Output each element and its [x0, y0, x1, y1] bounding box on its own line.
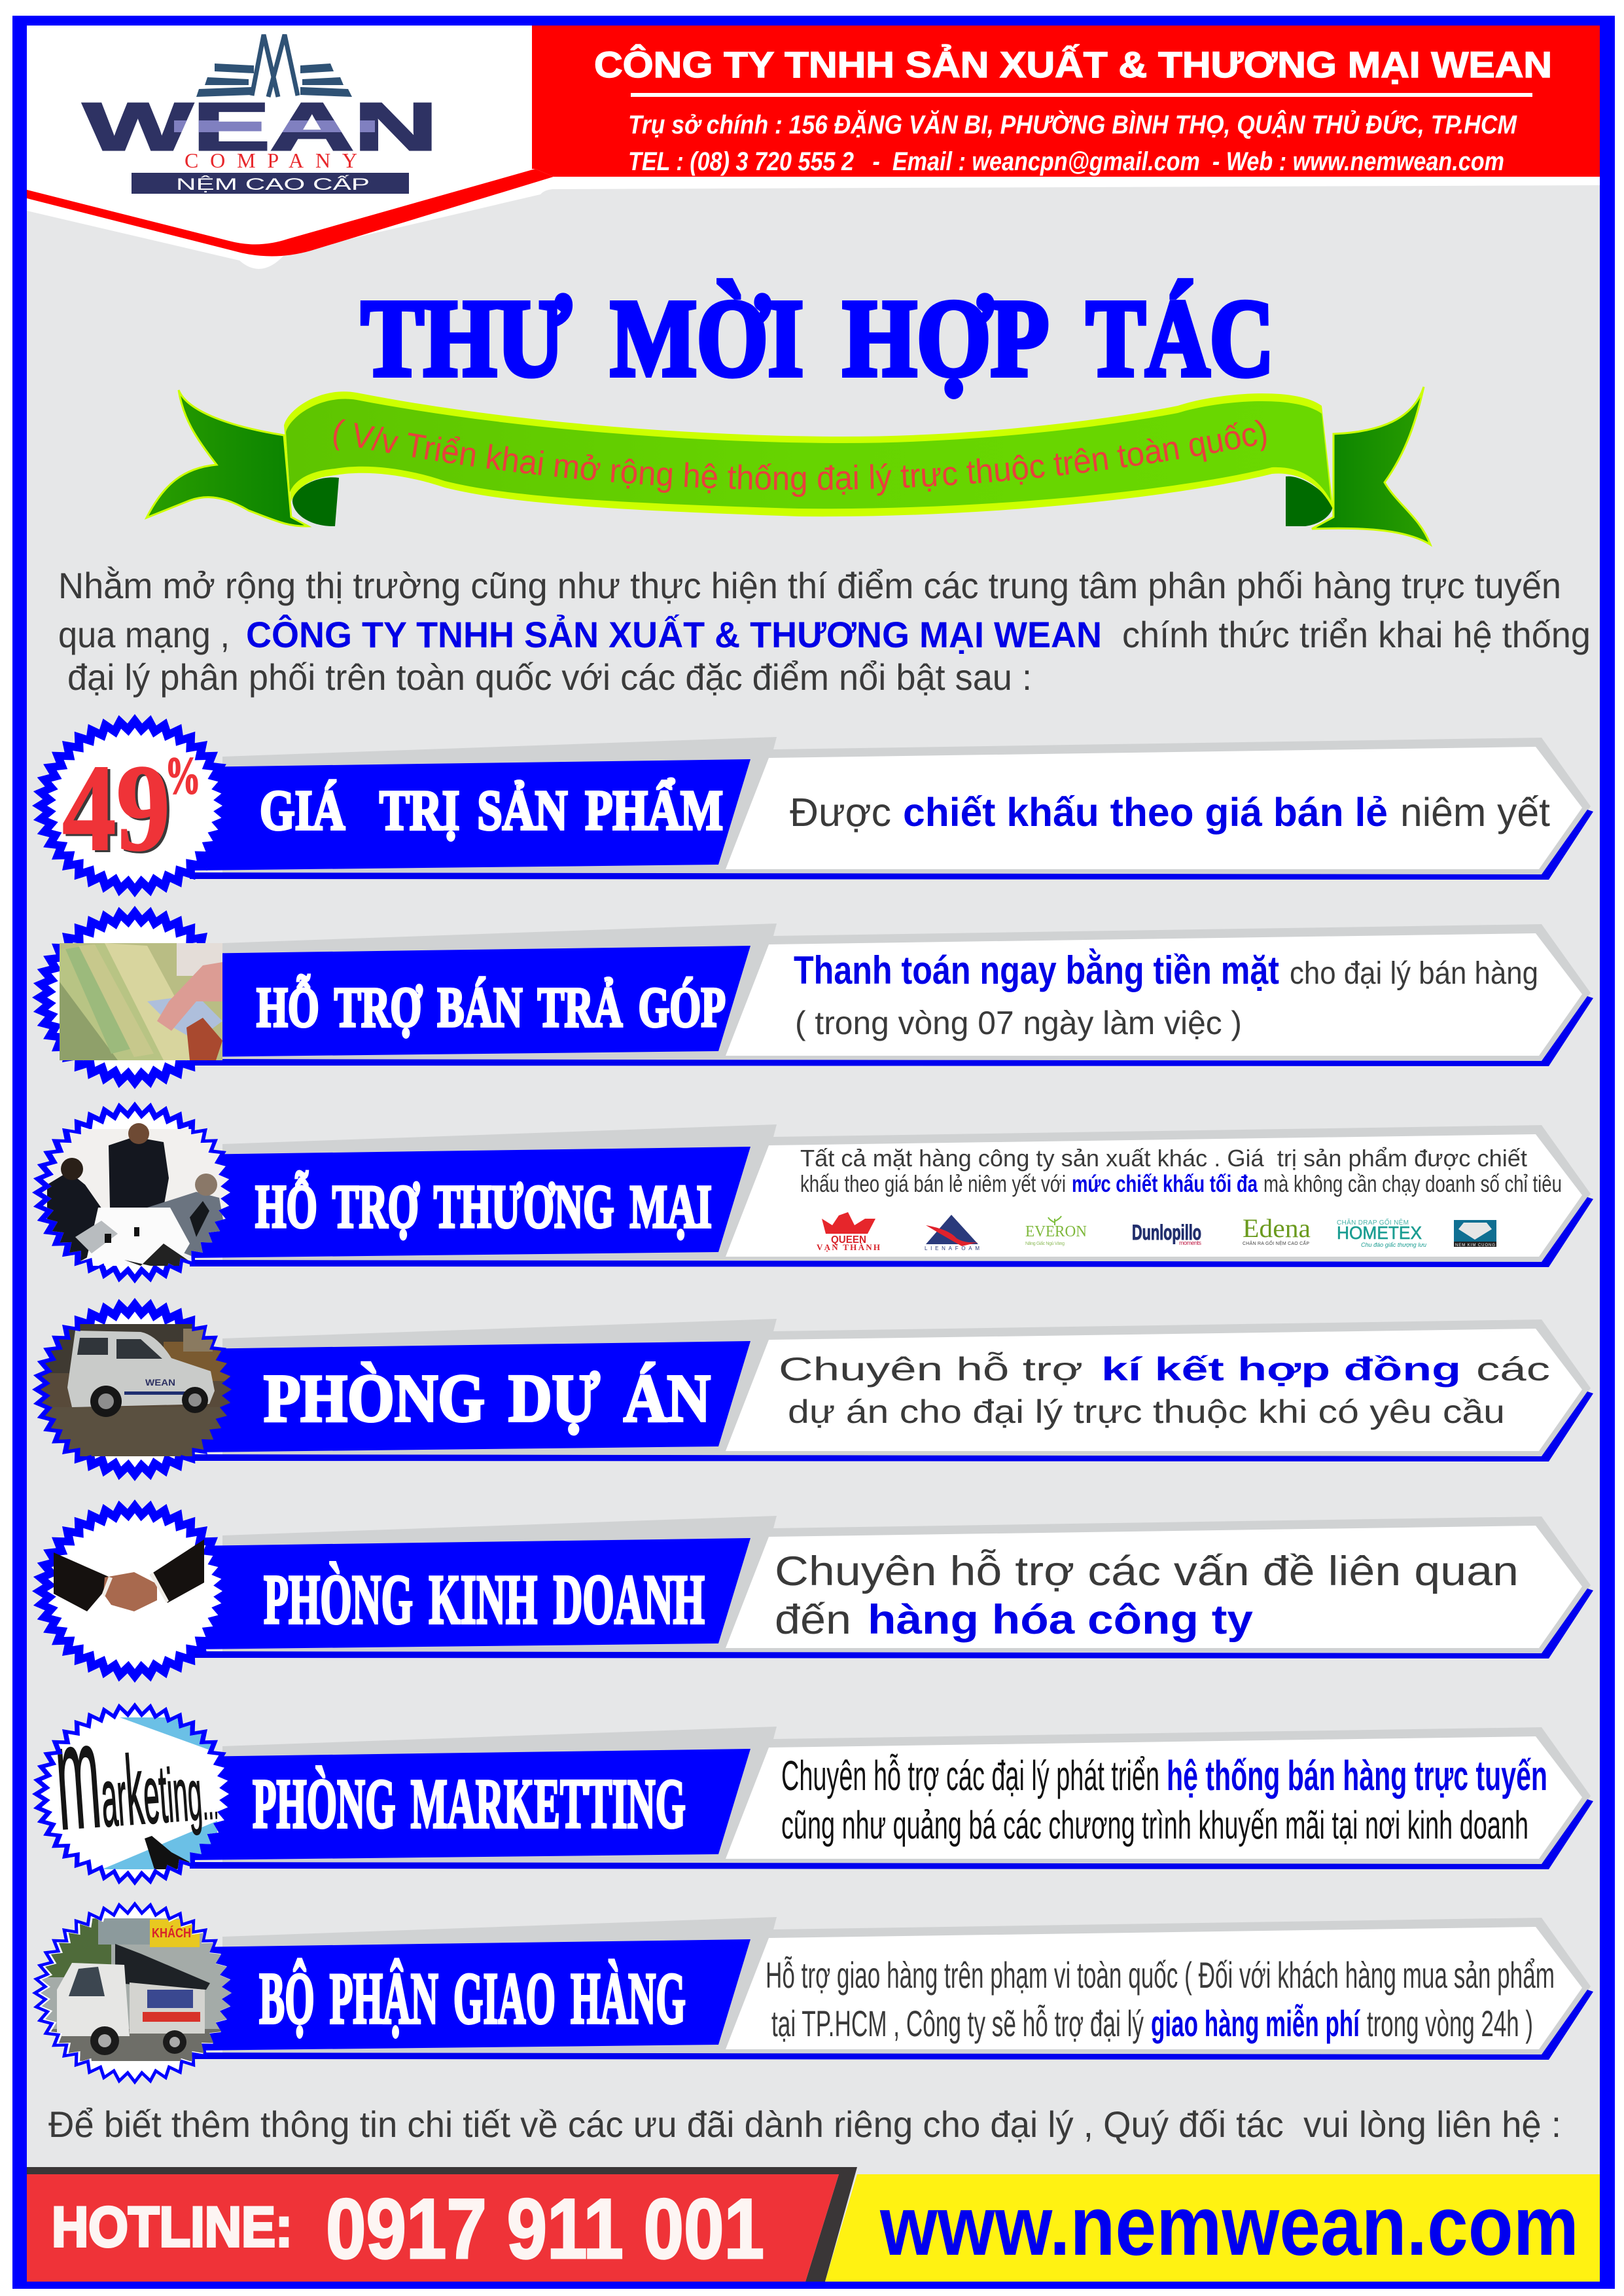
row 1 description: niêm yết: [1400, 790, 1550, 834]
row 7 heading: BỘ PHẬN GIAO HÀNG: [259, 1958, 686, 2039]
row 4 description: Chuyên hỗ trợ: [779, 1351, 1083, 1388]
intro paragraph: Nhằm mở rộng thị trường cũng như thực hiện thí điểm các trung tâm phân phối hàng trực tuyến: [58, 565, 1561, 606]
title: MỜI: [610, 278, 803, 399]
row 7 band: [190, 1917, 1593, 2060]
row 3 description: mức chiết khấu tối đa: [1072, 1170, 1258, 1197]
row 5 description: hàng hóa công ty: [868, 1597, 1253, 1643]
logo: Queen Van Thanh: QUEEN: [831, 1234, 866, 1246]
logo: Hometex: CHĂN DRAP GỐI NỆM: [1337, 1217, 1409, 1227]
company logo: [83, 35, 438, 194]
row 2 heading: HỖ TRỢ BÁN TRẢ GÓP: [256, 975, 726, 1039]
logo: Everon: [1025, 1216, 1087, 1246]
ribbon left tail: [147, 390, 308, 526]
row 6 heading: PHÒNG MARKETTING: [253, 1765, 686, 1843]
row 5: phong kinh doanh: [32, 1499, 1593, 1683]
hotline label: HOTLINE:: [52, 2196, 292, 2259]
row 3 badge meeting photo: [32, 1102, 238, 1283]
row 4 band: [190, 1319, 1593, 1462]
intro paragraph: chính thức triển khai hệ thống: [1122, 614, 1591, 655]
row 6 badge marketing photo: marketing...: [50, 1682, 222, 1861]
row 4: phong du an: [32, 1298, 1593, 1481]
logo: Queen Van Thanh: VẠN THÀNH: [817, 1242, 880, 1252]
hotline panel: [27, 2174, 839, 2282]
row 5 badge handshake photo: [32, 1499, 238, 1683]
row 4 description: các: [1476, 1351, 1550, 1388]
company name: CÔNG TY TNHH SẢN XUẤT & THƯƠNG MẠI WEAN: [594, 44, 1552, 85]
ribbon: [144, 386, 1432, 547]
brand logos: [817, 1212, 1496, 1252]
row 5 heading: PHÒNG KINH DOANH: [264, 1561, 705, 1639]
row 2 badge money photo: [32, 906, 238, 1089]
title: TÁC: [1086, 278, 1274, 399]
row 1 badge 49%: %: [165, 747, 201, 805]
row 4 badge car photo: [32, 1298, 238, 1481]
logo: Hometex: [1337, 1217, 1426, 1248]
row 7 badge truck photo: KHÁCH: [152, 1926, 191, 1941]
row 4 description: dự án cho đại lý trực thuộc khi có yêu cầu: [788, 1393, 1505, 1430]
logo: Nem Kim Cuong: [1454, 1220, 1496, 1247]
row 2 description: cho đại lý bán hàng: [1290, 956, 1538, 991]
header red panel: [532, 26, 1600, 177]
logo: Everon: Nâng Giấc Ngủ Vàng: [1025, 1240, 1065, 1246]
ribbon right tail: [1312, 387, 1430, 545]
row 6 band: [190, 1727, 1593, 1869]
logo: Lienafoam: [925, 1215, 980, 1251]
row 7 badge truck photo: [32, 1901, 238, 2085]
intro paragraph: qua mạng ,: [58, 614, 230, 655]
row 4 description: kí kết hợp đồng: [1101, 1351, 1461, 1388]
row 5 description: [775, 1549, 1519, 1643]
logo company line: COMPANY: [185, 149, 357, 172]
row 1 description: chiết khấu theo giá bán lẻ: [903, 790, 1388, 834]
intro paragraph: đại lý phân phối trên toàn quốc với các đặc điểm nổi bật sau :: [67, 656, 1032, 698]
row 2 description: ( trong vòng 07 ngày làm việc ): [795, 1005, 1242, 1041]
logo: Nem Kim Cuong: NEM KIM CUONG: [1455, 1244, 1495, 1247]
row 5 description: Chuyên hỗ trợ các vấn đề liên quan: [775, 1549, 1519, 1594]
row 7 description: giao hàng miễn phí: [1151, 2003, 1361, 2044]
address: Trụ sở chính : 156 ĐẶNG VĂN BI, PHƯỜNG BÌNH THỌ, QUẬN THỦ ĐỨC, TP.HCM: [628, 109, 1517, 139]
ribbon right fold: [1286, 476, 1333, 526]
row 7: bo phan giao hang: [32, 1901, 1593, 2085]
ribbon rim: [284, 391, 1333, 516]
ribbon left fold: [292, 477, 339, 526]
row 6 description: [781, 1752, 1547, 1847]
row 3: ho tro thuong mai: [32, 1102, 1593, 1283]
title: [361, 278, 1274, 399]
row 1 description: [790, 790, 1550, 834]
row 1 description: Được: [790, 790, 891, 834]
contact line: TEL : (08) 3 720 555 2 - Email : weancpn@gmail.com - Web : www.nemwean.com: [628, 147, 1504, 176]
row 1 badge 49%: [32, 714, 238, 897]
row 7 description: [766, 1954, 1555, 2044]
hotline number: 0917 911 001: [326, 2181, 764, 2276]
row 7 description: tại TP.HCM , Công ty sẽ hỗ trợ đại lý: [771, 2003, 1144, 2044]
logo tower: [196, 35, 352, 97]
title: THƯ: [361, 278, 571, 399]
row 2: ho tro ban tra gop: [32, 906, 1593, 1089]
logo: Queen Van Thanh: [817, 1212, 880, 1252]
logo tagline: [132, 173, 409, 194]
header white panel: [27, 26, 1600, 269]
logo wordmark: WEAN: [83, 89, 438, 164]
logo: Edena: Edena: [1243, 1213, 1311, 1243]
title: HỢP: [843, 278, 1049, 399]
row 1 badge 49%: 49: [65, 742, 173, 879]
website panel: [825, 2174, 1600, 2282]
row 4 heading: PHÒNG DỰ ÁN: [264, 1361, 711, 1436]
row 3 description: khấu theo giá bán lẻ niêm yết với: [800, 1170, 1066, 1197]
row 1 badge 49%: 49: [62, 740, 170, 877]
row 4 description: [779, 1351, 1550, 1430]
logo band: [174, 120, 375, 132]
row 2 band: [190, 924, 1593, 1066]
row 2 description: Thanh toán ngay bằng tiền mặt: [794, 948, 1279, 992]
ribbon body: [286, 399, 1331, 509]
logo: Everon: EVERON: [1025, 1223, 1087, 1240]
logo: Dunlopillo: [1132, 1221, 1201, 1246]
intro paragraph: [58, 565, 1591, 698]
intro paragraph: CÔNG TY TNHH SẢN XUẤT & THƯƠNG MẠI WEAN: [246, 614, 1102, 655]
row 6: phong marketting: [32, 1682, 1593, 1886]
row 2 description: [794, 948, 1538, 1041]
logo: Edena: CHĂN RA GỐI NỆM CAO CẤP: [1243, 1240, 1309, 1246]
logo: Lienafoam: LIENAFOAM: [925, 1246, 980, 1251]
row 5 description: đến: [775, 1597, 851, 1643]
row 3 band: [190, 1124, 1593, 1267]
ribbon subtitle: ( V/v Triển khai mở rộng hệ thống đại lý trực thuộc trên toàn quốc): [334, 419, 1267, 497]
row 6 description: Chuyên hỗ trợ các đại lý phát triển: [781, 1752, 1159, 1799]
hotline dark edge: [27, 2167, 857, 2282]
logo tagline: NỆM CAO CẤP: [176, 175, 370, 194]
row 1: gia tri san pham: [32, 714, 1593, 897]
row 3 heading: HỖ TRỢ THƯƠNG MẠI: [255, 1172, 712, 1241]
row 4 badge car photo: WEAN: [145, 1377, 175, 1388]
row 3 description: [800, 1145, 1562, 1197]
closing sentence: Để biết thêm thông tin chi tiết về các ưu đãi dành riêng cho đại lý , Quý đối tác vui lòng liên hệ :: [48, 2104, 1561, 2145]
row 3 description: Tất cả mặt hàng công ty sản xuất khác . Giá trị sản phẩm được chiết: [800, 1145, 1527, 1172]
logo: Dunlopillo: Dunlopillo: [1132, 1221, 1201, 1244]
header: [27, 26, 1600, 269]
logo: Dunlopillo: moments: [1179, 1240, 1201, 1246]
row 6 badge marketing photo: [32, 1702, 229, 1886]
row 1 heading: GIÁ TRỊ SẢN PHẨM: [260, 778, 723, 842]
logo: Hometex: HOMETEX: [1337, 1223, 1422, 1243]
red chevron: [27, 169, 554, 257]
header rule: [631, 93, 1532, 97]
footer: [27, 2167, 1600, 2282]
row 5 band: [190, 1516, 1593, 1659]
row 1 band: [190, 737, 1593, 880]
logo: Hometex: Chu đáo giấc thượng lưu: [1361, 1242, 1426, 1248]
